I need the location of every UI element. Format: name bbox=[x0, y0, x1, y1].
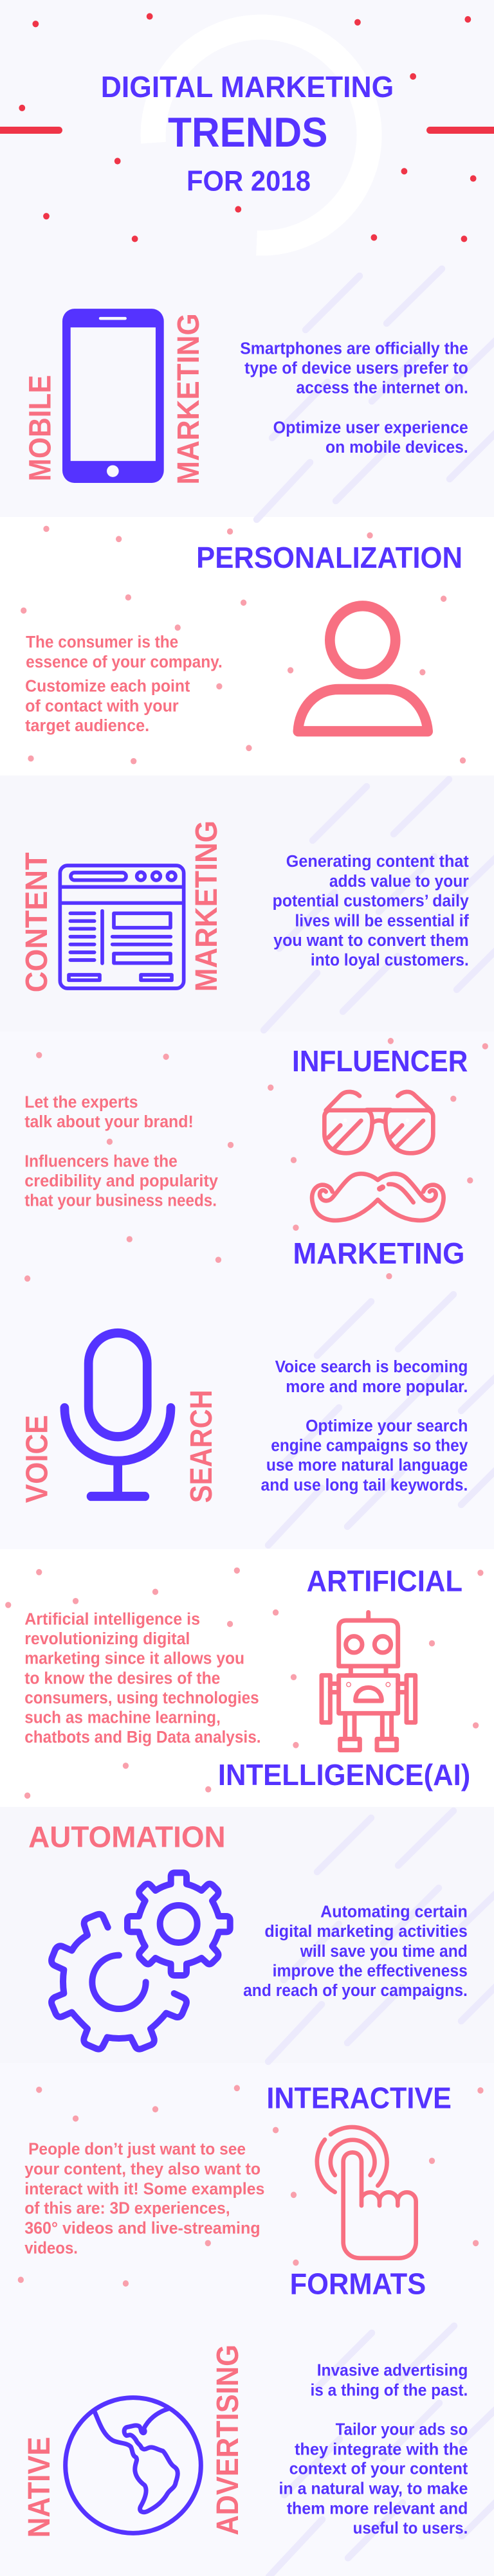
heading: automation: AUTOMATION bbox=[28, 1820, 226, 1854]
title: DIGITAL MARKETING bbox=[101, 70, 394, 104]
text: AI description: chatbots and Big Data analysis. bbox=[24, 1728, 261, 1746]
icon: tapping hand bbox=[317, 2127, 416, 2258]
section dots bbox=[24, 1038, 488, 1282]
text: personalization description bbox=[25, 633, 223, 735]
text: interactive description: interact with it! Some examples bbox=[24, 2180, 264, 2198]
text: content description bbox=[273, 853, 469, 970]
text: influencer description: that your business needs. bbox=[24, 1192, 217, 1210]
panel: header bbox=[0, 0, 494, 260]
text: content description: you want to convert them bbox=[273, 931, 469, 950]
text: mobile description: on mobile devices. bbox=[325, 439, 468, 457]
text: content description: lives will be essential if bbox=[295, 912, 469, 930]
text: mobile description: type of device users prefer to bbox=[244, 359, 468, 377]
icon: browser window bbox=[60, 866, 184, 988]
panel: artificial intelligence bbox=[0, 1549, 494, 1807]
text: voice description: and use long tail keywords. bbox=[261, 1476, 468, 1494]
text: content description: adds value to your bbox=[329, 873, 469, 891]
text: content description: potential customers’ daily bbox=[273, 892, 469, 911]
text: personalization description: essence of your company. bbox=[26, 653, 223, 671]
heading: marketing: MARKETING bbox=[293, 1237, 464, 1270]
heading: content: CONTENT bbox=[19, 852, 54, 992]
text: interactive description: your content, they also want to bbox=[24, 2160, 261, 2179]
text: voice description: engine campaigns so they bbox=[271, 1437, 468, 1455]
heading: intelligence: INTELLIGENCE(AI) bbox=[218, 1758, 470, 1791]
heading: marketing: MARKETING bbox=[171, 313, 206, 485]
section dots bbox=[18, 2085, 484, 2287]
heading: influencer: INFLUENCER bbox=[292, 1044, 468, 1078]
icon: gears bbox=[51, 1873, 230, 2049]
text: voice description: use more natural language bbox=[266, 1456, 468, 1474]
icon: robot bbox=[322, 1612, 416, 1750]
text: AI description: such as machine learning, bbox=[24, 1709, 221, 1727]
text: personalization description: of contact with your bbox=[25, 697, 179, 716]
text: personalization description: The consumer is the bbox=[26, 633, 178, 651]
text: voice description: more and more popular. bbox=[286, 1377, 468, 1396]
heading: personalization: PERSONALIZATION bbox=[196, 541, 462, 574]
text: native description: Invasive advertising bbox=[317, 2361, 468, 2380]
section dots bbox=[21, 526, 466, 765]
text: mobile description bbox=[240, 340, 468, 457]
text: native description: in a natural way, to make bbox=[279, 2480, 468, 2498]
heading: artificial: ARTIFICIAL bbox=[307, 1565, 462, 1598]
icon: moustache bbox=[312, 1174, 444, 1220]
title: FOR 2018 bbox=[187, 166, 311, 197]
text: automation description: Automating certain bbox=[320, 1903, 468, 1921]
heading: voice: VOICE bbox=[19, 1415, 54, 1503]
red bar right bbox=[430, 127, 494, 134]
text: automation description: digital marketing activities bbox=[264, 1923, 468, 1941]
text: interactive description: videos. bbox=[24, 2239, 78, 2257]
text: automation description bbox=[243, 1903, 468, 2000]
ring decoration bbox=[153, 27, 369, 243]
text: AI description bbox=[24, 1610, 261, 1746]
heading: marketing: MARKETING bbox=[189, 821, 224, 992]
icon: microphone bbox=[64, 1333, 170, 1496]
red bar left bbox=[0, 127, 59, 134]
heading: formats: FORMATS bbox=[290, 2267, 426, 2301]
text: automation description: and reach of your campaigns. bbox=[243, 1982, 468, 2000]
heading: interactive: INTERACTIVE bbox=[266, 2082, 452, 2115]
text: AI description: Artificial intelligence is bbox=[24, 1610, 200, 1629]
text: mobile description: Optimize user experience bbox=[273, 419, 468, 437]
panel: native advertising bbox=[0, 2314, 494, 2576]
text: voice description: Voice search is becoming bbox=[275, 1358, 468, 1376]
icon: person bbox=[298, 606, 428, 731]
text: native description: useful to users. bbox=[353, 2519, 468, 2537]
text: influencer description: Let the experts bbox=[24, 1093, 138, 1112]
text: personalization description: target audience. bbox=[25, 717, 149, 735]
text: native description: context of your content bbox=[289, 2460, 468, 2478]
icon: globe bbox=[66, 2398, 201, 2533]
text: influencer description: Influencers have the bbox=[24, 1152, 178, 1170]
text: interactive description: 360° videos and live-streaming bbox=[24, 2219, 261, 2238]
text: interactive description: of this are: 3D experiences, bbox=[24, 2199, 230, 2218]
panel: interactive formats bbox=[0, 2063, 494, 2314]
panel: automation bbox=[0, 1807, 494, 2065]
text: voice description: Optimize your search bbox=[306, 1417, 468, 1435]
panel: influencer marketing bbox=[0, 1031, 494, 1291]
heading: search: SEARCH bbox=[184, 1390, 219, 1503]
panel: mobile marketing bbox=[0, 260, 494, 517]
text: native description: they integrate with the bbox=[295, 2440, 468, 2458]
text: native description bbox=[279, 2361, 468, 2537]
header dots bbox=[19, 13, 477, 242]
text: automation description: will save you time and bbox=[300, 1942, 468, 1961]
text: automation description: improve the effectiveness bbox=[273, 1962, 468, 1981]
heading: mobile: MOBILE bbox=[23, 375, 57, 481]
text: AI description: revolutionizing digital bbox=[24, 1630, 190, 1648]
text: influencer description: credibility and popularity bbox=[24, 1172, 218, 1190]
text: personalization description: Customize each point bbox=[25, 677, 190, 696]
panel: voice search bbox=[0, 1291, 494, 1548]
icon: smartphone bbox=[62, 309, 164, 483]
panel: content marketing bbox=[0, 776, 494, 1031]
text: voice description bbox=[261, 1358, 468, 1494]
text: mobile description: Smartphones are officially the bbox=[240, 340, 468, 358]
text: AI description: consumers, using technologies bbox=[24, 1689, 259, 1707]
heading: native: NATIVE bbox=[21, 2437, 57, 2537]
text: AI description: marketing since it allows you bbox=[24, 1649, 244, 1668]
text: influencer description bbox=[24, 1093, 218, 1210]
text: native description: them more relevant and bbox=[287, 2499, 468, 2517]
text: content description: Generating content that bbox=[286, 853, 469, 871]
text: content description: into loyal customers. bbox=[311, 951, 469, 970]
title bbox=[101, 70, 394, 197]
icon: sunglasses bbox=[324, 1092, 433, 1153]
text: native description: Tailor your ads so bbox=[336, 2420, 468, 2439]
text: native description: is a thing of the past. bbox=[310, 2381, 468, 2399]
title: TRENDS bbox=[168, 110, 327, 156]
text: mobile description: access the internet on. bbox=[296, 379, 468, 397]
panel: personalization bbox=[0, 517, 494, 776]
section dots bbox=[5, 1567, 484, 1799]
text: influencer description: talk about your brand! bbox=[24, 1113, 194, 1131]
text: interactive description: People don’t just want to see bbox=[28, 2140, 246, 2159]
text: interactive description bbox=[24, 2140, 264, 2257]
text: AI description: to know the desires of the bbox=[24, 1669, 220, 1687]
heading: advertising: ADVERTISING bbox=[210, 2345, 245, 2535]
